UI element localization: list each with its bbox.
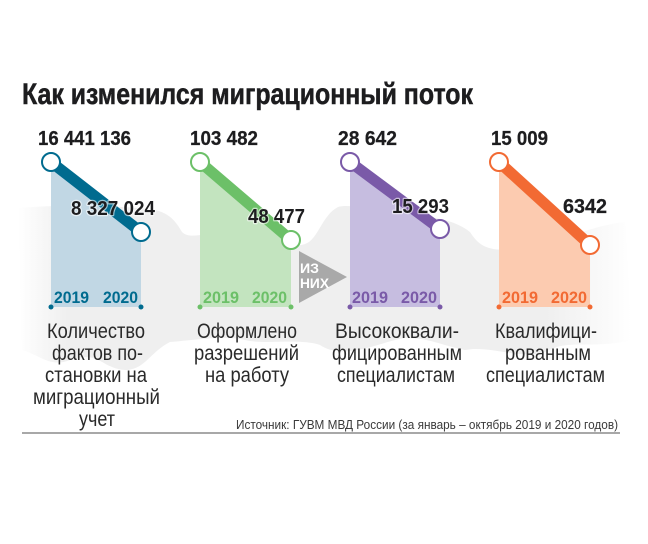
panel: migration registrations xyxy=(33,127,160,431)
end marker xyxy=(282,231,300,249)
start marker xyxy=(341,153,359,171)
source note: Источник: ГУВМ МВД России (за январь – октябрь 2019 и 2020 годов) xyxy=(236,417,618,432)
caption: разрешений xyxy=(194,341,299,365)
caption: становки на xyxy=(45,363,147,387)
axis dots xyxy=(496,304,592,310)
trend line xyxy=(200,162,291,240)
area chart xyxy=(350,162,440,307)
caption xyxy=(33,319,160,431)
caption: учет xyxy=(79,407,115,431)
end marker xyxy=(581,236,599,254)
area chart xyxy=(200,162,291,307)
arrow: of them xyxy=(299,251,347,303)
year labels: 2020 xyxy=(252,289,287,307)
caption: миграционный xyxy=(33,385,160,409)
arrow: of them: НИХ xyxy=(300,275,330,291)
caption: фицированным xyxy=(332,341,462,365)
title: Как изменился миграционный поток xyxy=(22,78,474,111)
caption: Высококвали- xyxy=(335,319,459,343)
panel: work permits xyxy=(190,127,305,387)
caption: фактов по- xyxy=(52,341,143,365)
panel: qualified specialists xyxy=(486,127,607,387)
year labels xyxy=(352,289,437,307)
value 2020: 48 477 xyxy=(248,205,305,228)
value 2019: 28 642 xyxy=(338,127,397,150)
year labels: 2020 xyxy=(401,289,437,307)
caption: Количество xyxy=(47,319,145,343)
background: grey cloud shape xyxy=(18,206,632,370)
caption xyxy=(486,319,605,387)
trend line xyxy=(51,162,141,232)
caption xyxy=(332,319,462,387)
year labels: 2019 xyxy=(203,289,239,307)
caption xyxy=(194,319,299,387)
arrow: of them: ИЗ xyxy=(300,260,319,276)
start marker xyxy=(490,153,508,171)
axis dots xyxy=(48,304,144,310)
area chart xyxy=(499,162,590,307)
caption: Оформлено xyxy=(197,319,297,343)
axis dots xyxy=(198,304,294,310)
caption: специалистам xyxy=(486,363,605,387)
value 2020: 8 327 024 xyxy=(71,197,156,220)
year labels: 2020 xyxy=(551,289,587,307)
axis dots xyxy=(348,304,442,310)
start marker xyxy=(42,153,60,171)
value 2020: 6342 xyxy=(563,195,607,218)
year labels: 2019 xyxy=(54,289,89,307)
value 2019: 15 009 xyxy=(491,127,548,150)
value 2019: 16 441 136 xyxy=(38,127,131,150)
year labels xyxy=(203,289,287,307)
start marker xyxy=(191,153,209,171)
caption: специалистам xyxy=(337,363,455,387)
value 2019: 103 482 xyxy=(190,127,258,150)
year labels xyxy=(54,289,138,307)
end marker xyxy=(431,220,449,238)
caption: на работу xyxy=(205,363,289,387)
area chart xyxy=(51,162,141,307)
panel: highly qualified specialists xyxy=(332,127,462,387)
end marker xyxy=(132,223,150,241)
caption: Квалифици- xyxy=(495,319,597,343)
year labels: 2020 xyxy=(103,289,138,307)
trend line xyxy=(499,162,590,245)
year labels: 2019 xyxy=(502,289,538,307)
caption: рованным xyxy=(505,341,591,365)
year labels: 2019 xyxy=(352,289,388,307)
value 2020: 15 293 xyxy=(392,195,449,218)
trend line xyxy=(350,162,440,229)
year labels xyxy=(502,289,587,307)
